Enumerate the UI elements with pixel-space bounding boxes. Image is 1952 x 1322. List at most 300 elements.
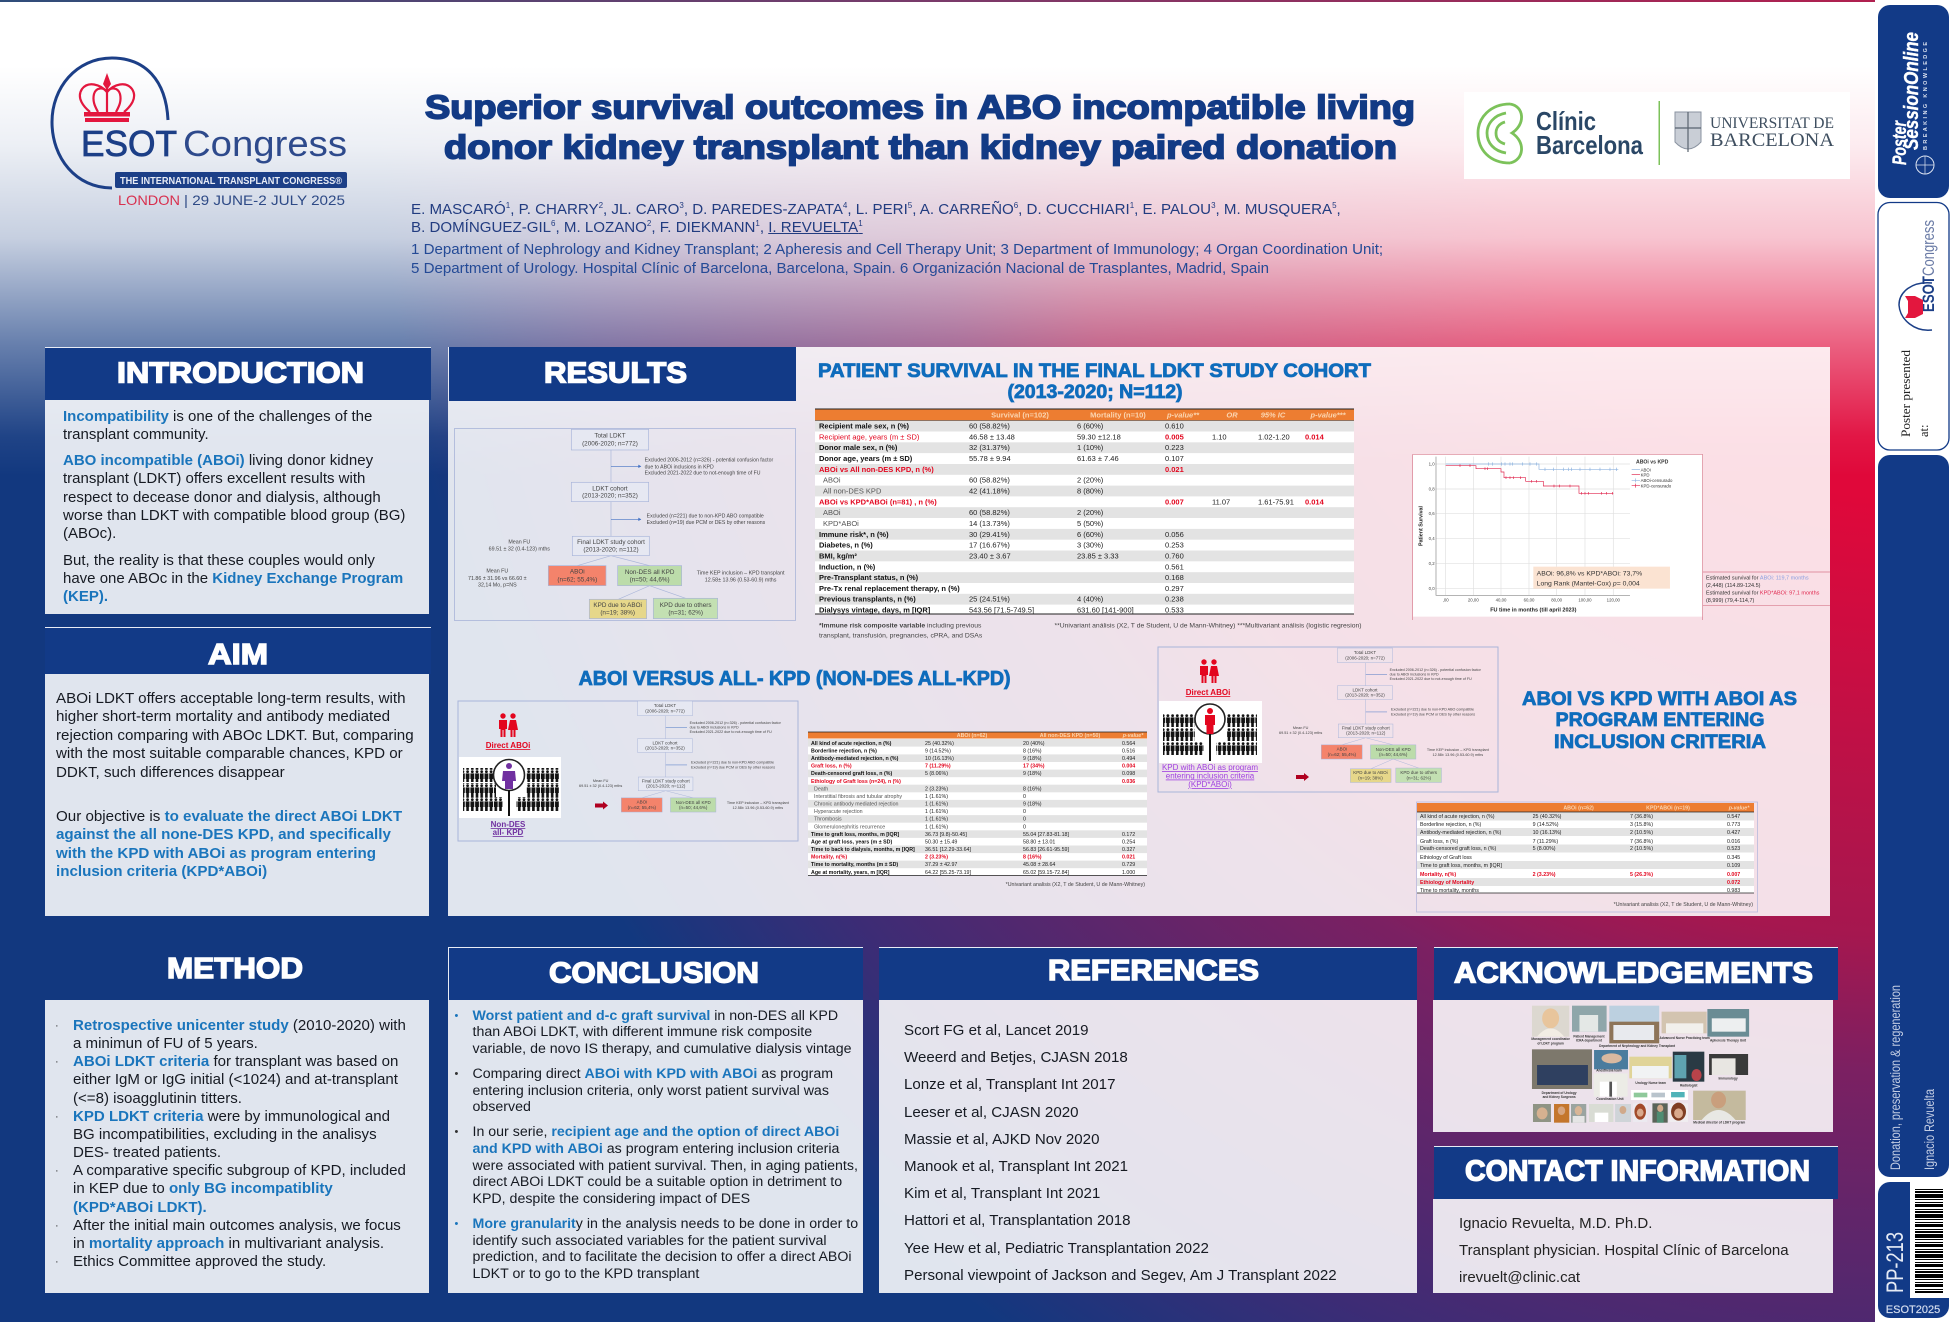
table: ABOi versus all KPD: Chronic antibody mediated rejection: [814, 802, 899, 808]
heading: patient survival: PATIENT SURVIVAL IN THE FINAL LDKT STUDY COHORT: [818, 360, 1371, 382]
text: introduction: worse than LDKT with compatible blood group (BG): [63, 507, 405, 524]
heading: acknowledgements: ACKNOWLEDGEMENTS: [1454, 958, 1813, 990]
table: ABOi versus all KPD: 17 (34%): [1023, 764, 1045, 770]
photo collage: Radiologist: [1680, 1084, 1698, 1088]
icon: crowd and magnifier: [459, 757, 561, 818]
flow boxes: Excluded (n=221) due to non-KPD ABO compatible: [691, 761, 774, 765]
icon: crowd and magnifier: [1159, 701, 1262, 763]
panel: method: ·: [55, 1220, 59, 1232]
logo: Clinic Barcelona and Universitat de Barcelona: Clínic: [1536, 106, 1596, 136]
flowchart: study cohort: 12.58± 13.96 (0.53-60.9) mths: [705, 577, 777, 583]
table: ABOi versus all KPD: 8 (16%): [1023, 786, 1042, 792]
flow boxes: Total LDKT: [1354, 650, 1376, 655]
table: ABOi versus all KPD: 2 (3.23%): [925, 786, 948, 792]
tab: topic and author: Donation, preservation & regeneration: [1888, 985, 1903, 1170]
table: ABOi versus all KPD: Thrombosis: [814, 817, 842, 823]
heading: ABOi vs KPD with ABOi: PROGRAM ENTERING: [1556, 709, 1764, 731]
tab: Poster Session Online: [1878, 5, 1949, 198]
text: method: a minimun of FU of 5 years.: [73, 1035, 258, 1052]
table: ABOi versus KPD with ABOi: Mortality, n(%): [1420, 872, 1456, 878]
table: ABOi versus all KPD: 0.516: [1122, 748, 1135, 754]
flow boxes: [579, 701, 790, 812]
table: ABOi versus all KPD: 50.30 ± 15.49: [925, 840, 957, 846]
table: ABOi versus KPD with ABOi: Borderline rejection, n (%): [1420, 822, 1481, 828]
table: patient survival: 30 (29.41%): [969, 530, 1010, 539]
table: ABOi versus KPD with ABOi: Graft loss, n (%): [1420, 839, 1458, 845]
y axis labels: 0,6: [1429, 511, 1435, 516]
flow boxes: Excluded (n=19) due PCM or DES by other reasons: [1391, 712, 1475, 716]
flowchart: study cohort: (2006-2020; n=772): [582, 440, 638, 447]
heading: ABOi versus all KPD: ABOI VERSUS ALL- KPD (NON-DES ALL-KPD): [579, 668, 1011, 690]
callout: survival rates: ABOi: 96,8% vs KPD*ABOi: 73,7%: [1537, 571, 1642, 578]
table: patient survival: p-value**: [1166, 410, 1200, 420]
table: patient survival: All non-DES KPD: [823, 486, 882, 496]
flow boxes: (n=50; 44,6%): [1379, 752, 1408, 757]
table: ABOi versus KPD with ABOi: *Univariant analisis (X2, T de Student, U de Mann-Whitney): [1614, 902, 1753, 908]
legend: ABOi: [1641, 467, 1651, 472]
flowchart: study cohort: (2013-2020; n=352): [582, 493, 638, 500]
heading: contact information: CONTACT INFORMATION: [1465, 1156, 1810, 1188]
text: method: A comparative specific subgroup of KPD, included: [73, 1162, 406, 1179]
flow boxes: (n=62; 55,4%): [1328, 752, 1356, 757]
x axis labels: ,00: [1443, 597, 1449, 602]
flow boxes: Excluded 2021-2022 due to not-enough time of FU: [690, 730, 772, 734]
flowchart: study cohort: Total LDKT: [594, 433, 626, 440]
text: introduction: Incompatibility is one of the challenges of the: [63, 408, 372, 424]
heading: aim: AIM: [208, 639, 268, 671]
table: patient survival: Diabetes, n (%): [819, 541, 873, 550]
heading: ABOi vs KPD with ABOi: [1522, 688, 1797, 753]
flow boxes: (n=62; 55,4%): [628, 805, 656, 810]
x axis labels: 80,00: [1551, 597, 1563, 602]
text: aim: rejection comparing with ABOc LDKT. But, comparing: [56, 727, 414, 744]
heading: introduction: [45, 347, 431, 400]
table: ABOi versus KPD with ABOi: 0.016: [1727, 839, 1740, 845]
table: ABOi versus all KPD: 1.000: [1122, 870, 1135, 876]
table: ABOi versus all KPD: 56.83 [26.61-95.59]: [1023, 847, 1069, 853]
heading: acknowledgements: [1434, 947, 1838, 1000]
x axis labels: 20,00: [1468, 597, 1479, 602]
icon: couple: [1200, 659, 1219, 683]
callout: estimated survival: Estimated survival for ABOi: 119,7 months: [1706, 575, 1809, 581]
flow boxes: due to ABOi inclusions in KPD: [690, 726, 739, 730]
flow boxes: (2013-2020; n=352): [1345, 693, 1385, 698]
table: ABOi versus all KPD: 2 (3.23%): [925, 855, 948, 861]
text: conclusion: More granularity in the analysis needs to be done in order to: [472, 1216, 858, 1232]
flowchart: study cohort: (n=19; 38%): [600, 610, 635, 617]
table: patient survival: 1.02-1.20: [1258, 432, 1290, 441]
table: ABOi versus all KPD: 36.73 [9.8)-50.45]: [925, 832, 967, 838]
flow boxes: Final LDKT study cohort: [1342, 725, 1390, 730]
text: references: Scort FG et al, Lancet 2019: [904, 1022, 1089, 1039]
table: patient survival: 95% IC: [1261, 410, 1286, 420]
y axis labels: 0,8: [1429, 486, 1435, 491]
title: [424, 88, 1415, 166]
panel: conclusion: [448, 947, 863, 1293]
table: patient survival: 0.014: [1305, 497, 1325, 506]
text: conclusion: than ABOi LDKT, with different immune risk composite: [472, 1024, 812, 1040]
text: method: (<=8) isoagglutinin titters.: [73, 1090, 242, 1107]
flowchart: study cohort: KPD due to others: [660, 602, 712, 609]
flow boxes: Excluded 2006-2012 (n=326) - potential confusion factor: [690, 721, 782, 725]
text: references: Yee Hew et al, Pediatric Transplantation 2022: [904, 1240, 1209, 1257]
table: ABOi versus all KPD: 1 (1.61%): [925, 817, 948, 823]
text: method: BG incompatibilities, excluding in the analisys: [73, 1126, 377, 1143]
table: patient survival: 0.610: [1165, 422, 1184, 431]
heading: references: REFERENCES: [1048, 955, 1259, 987]
text: conclusion: entering inclusion criteria, only worst patient survival was: [472, 1083, 829, 1099]
table: patient survival: 8 (80%): [1077, 486, 1104, 496]
text: method: ABOi LDKT criteria for transplant was based on: [73, 1053, 398, 1070]
flowchart: study cohort: [454, 428, 796, 620]
panel: introduction: [45, 347, 431, 614]
table: ABOi versus all KPD: 0.172: [1122, 832, 1135, 838]
heading: introduction: INTRODUCTION: [117, 358, 364, 390]
text: aim: inclusion criteria (KPD*ABOi): [56, 863, 267, 880]
text: method: (KPD*ABOi LDKT).: [73, 1199, 207, 1216]
table: patient survival: Pre-Transplant status, n (%): [819, 573, 919, 582]
flowchart: ABOi versus all KPD: [458, 701, 798, 841]
tab: poster code and barcode: PP-213: [1882, 1232, 1909, 1293]
text: introduction: transplant community.: [63, 426, 209, 443]
table: ABOi versus all KPD: 8 (16%): [1023, 855, 1042, 861]
flow boxes: KPD due to ABOi: [1353, 770, 1388, 775]
table: ABOi versus KPD with ABOi: KPD*ABOi (n=19): [1646, 806, 1690, 812]
tab: topic and author: [1878, 455, 1949, 1177]
text: conclusion: Worst patient and d-c graft survival in non-DES all KPD: [472, 1008, 838, 1024]
text: references: Personal viewpoint of Jackson and Segev, Am J Transplant 2022: [904, 1267, 1337, 1284]
title: donor kidney transplant than kidney paired donation: [444, 128, 1397, 166]
flow boxes: (2013-2020; n=112): [646, 784, 686, 789]
flow boxes: Time KEP inclusion – KPD transplant: [727, 801, 790, 805]
text: aim: with the most suitable comparable chances, KPD or: [56, 745, 403, 762]
panel: method: [45, 1000, 429, 1293]
table: patient survival: 0.005: [1165, 432, 1184, 441]
legend: ABOi-censurado: [1641, 478, 1673, 483]
photo collage: Department of Urology: [1542, 1091, 1577, 1095]
table: ABOi versus KPD with ABOi: p-value*: [1728, 806, 1750, 812]
text: introduction: But, the reality is that these couples would only: [63, 552, 375, 569]
table: ABOi versus all KPD: 0.494: [1122, 756, 1135, 762]
photo collage: [1531, 1006, 1750, 1125]
text: references: Kim et al, Transplant Int 2021: [904, 1185, 1100, 1202]
text: references: [904, 1022, 1337, 1284]
table: ABOi versus all KPD: 0.004: [1122, 764, 1135, 770]
tab: ESOT Congress: [1878, 202, 1949, 450]
photo collage: Immunology: [1719, 1076, 1738, 1080]
text: conclusion: variable, de novo IS therapy, and cumulative dialysis vintage: [472, 1041, 852, 1057]
x axis labels: 40,00: [1496, 597, 1507, 602]
text: method: Ethics Committee approved the study.: [73, 1253, 326, 1270]
table: patient survival: Immune risk*, n (%): [819, 530, 889, 539]
heading: results: RESULTS: [544, 358, 687, 390]
sidebar: [1875, 0, 1952, 1322]
table: ABOi versus all KPD: 20 (40%): [1023, 741, 1045, 747]
table: ABOi versus all KPD: Age at graft loss, years (m ± SD): [811, 840, 892, 846]
table: patient survival: ABOi: [823, 476, 841, 485]
table: patient survival: 543.56 [71.5-749.5]: [969, 606, 1034, 615]
text: introduction: transplant (LDKT) offers excellent results with: [63, 470, 365, 487]
heading: ABOi vs KPD with ABOi: INCLUSION CRITERIA: [1554, 731, 1766, 753]
flowchart: study cohort: Excluded 2006-2012 (n=326) - potential confusion factor: [645, 458, 773, 464]
text: method: in KEP due to only BG incompatiblity: [73, 1180, 333, 1197]
panel body: [1433, 1199, 1833, 1293]
table: ABOi versus all KPD: Antibody-mediated rejection, n (%): [811, 756, 899, 762]
heading: method: METHOD: [167, 953, 303, 985]
table: patient survival: 5 (50%): [1077, 519, 1104, 528]
table: ABOi versus all KPD: 0.327: [1122, 847, 1135, 853]
table: ABOi versus all KPD: ABOi (n=62): [957, 733, 987, 739]
table: patient survival: 46.58 ± 13.48: [969, 432, 1015, 441]
text: method: in mortality approach in multivariant analysis.: [73, 1235, 384, 1252]
tab: ESOT Congress: at:: [1917, 424, 1931, 437]
callout: estimated survival: Estimated survival for KPD*ABOi: 97,1 months: [1706, 590, 1820, 596]
table: ABOi versus KPD with ABOi: 2 (10.5%): [1630, 846, 1653, 852]
table: patient survival: 11.07: [1212, 497, 1230, 506]
table footnotes: [819, 622, 1362, 640]
table: patient survival: 1.61-75.91: [1258, 497, 1294, 506]
label: KPD with ABOi as program entering inclusion criteria: entering inclusion criteria: [1166, 772, 1255, 780]
table: ABOi versus all KPD: Mortality, n(%): [811, 855, 847, 861]
table: ABOi versus KPD with ABOi: Antibody-mediated rejection, n (%): [1420, 830, 1501, 836]
table: patient survival: 4 (40%): [1077, 595, 1104, 604]
table: ABOi versus all KPD: Graft loss, n (%): [811, 764, 852, 770]
photo collage: Medical director of LDKT program: [1693, 1121, 1745, 1125]
table: ABOi versus all KPD: All non-DES KPD (n=50): [1040, 733, 1100, 739]
table: ABOi versus KPD with ABOi: [1416, 802, 1758, 912]
title: Superior survival outcomes in ABO incompatible living: [425, 88, 1415, 126]
flow boxes: (n=50; 44,6%): [679, 805, 708, 810]
y axis labels: [1429, 461, 1435, 591]
flow boxes: Excluded (n=221) due to non-KPD ABO compatible: [1391, 708, 1474, 712]
flow boxes: (n=19; 38%): [1358, 776, 1383, 781]
table: patient survival: 0.297: [1165, 584, 1184, 593]
affiliations: 5 Department of Urology. Hospital Clínic of Barcelona, Barcelona, Spain. 6 Organización Nacional de Trasplantes, Madrid, Spain: [411, 260, 1269, 277]
photo collage: Patient Management: [1573, 1035, 1606, 1039]
table: ABOi versus all KPD: 9 (18%): [1023, 756, 1042, 762]
text: conclusion: [454, 1008, 858, 1282]
table: patient survival: 60 (58.82%): [969, 476, 1010, 485]
flowchart: study cohort: Final LDKT study cohort: [577, 539, 645, 546]
flow boxes: (2006-2020; n=772): [1345, 655, 1385, 660]
table: ABOi versus KPD with ABOi: Ethiology of Mortality: [1420, 880, 1474, 886]
table: ABOi versus all KPD: 0.021: [1122, 855, 1135, 861]
table: patient survival: ABOi vs All non-DES KPD, n (%): [819, 465, 934, 474]
heading: ABOi vs KPD with ABOi: ABOI VS KPD WITH ABOI AS: [1522, 688, 1797, 710]
flow boxes: Total LDKT: [654, 703, 676, 708]
text: contact details: irevuelt@clinic.cat: [1459, 1268, 1580, 1286]
logo: ESOT Congress: Congress: [183, 123, 347, 164]
logo: Clinic Barcelona and Universitat de Barcelona: UNIVERSITAT DE: [1710, 115, 1834, 132]
panel body: [448, 1000, 863, 1293]
table: patient survival: 0.056: [1165, 530, 1184, 539]
table: ABOi versus all KPD: Glomerulonephritis recurrence: [814, 824, 885, 830]
table: patient survival: 1 (10%): [1077, 443, 1104, 452]
table: patient survival: 0.007: [1165, 497, 1184, 506]
table: ABOi versus KPD with ABOi: Ethiology of Graft loss: [1420, 855, 1472, 861]
table: ABOi versus KPD with ABOi: ABOi (n=62): [1563, 806, 1594, 812]
flowchart: study cohort: KPD due to ABOi: [593, 602, 642, 609]
table: patient survival: 59.30 ±12.18: [1077, 432, 1121, 441]
text: method: DES- treated patients.: [73, 1144, 221, 1161]
photo collage: Coordination Unit: [1596, 1097, 1625, 1101]
panel: results: [448, 347, 1830, 916]
text: method: either IgM or IgG initial (<1024) and at-transplant: [73, 1071, 398, 1088]
panel: acknowledgements: [1433, 947, 1838, 1132]
x axis labels: 60,00: [1524, 597, 1535, 602]
table: ABOi versus KPD with ABOi: 0.773: [1727, 822, 1740, 828]
logo: Clinic Barcelona and Universitat de Barcelona: [1464, 92, 1850, 179]
authors: B. DOMÍNGUEZ-GIL6, M. LOZANO2, F. DIEKMANN1, I. REVUELTA1: [411, 219, 863, 236]
icon: couple: [499, 713, 518, 737]
table: ABOi versus all KPD: 36.51 [12.29-33.64]: [925, 847, 971, 853]
photo collage: Urology Nurse team: [1635, 1081, 1666, 1085]
flowchart: study cohort: Non-DES all KPD: [625, 569, 675, 576]
table: ABOi versus all KPD: Time to back to dialysis, months, m [IQR]: [811, 847, 915, 853]
text: method: KPD LDKT criteria were by immunological and: [73, 1108, 390, 1125]
table: ABOi versus all KPD: Death-censored graft loss, n (%): [811, 771, 892, 777]
table: patient survival: 42 (41.18%): [969, 486, 1010, 496]
label: KPD with ABOi as program entering inclusion criteria: (KPD*ABOi): [1188, 780, 1232, 789]
table: ABOi versus KPD with ABOi: 0.547: [1727, 814, 1740, 820]
legend: KPD: [1641, 472, 1650, 477]
table: patient survival: ABOi: [823, 508, 841, 517]
photo collage: Apheresis Therapy Unit: [1710, 1039, 1747, 1043]
flowchart: study cohort: Mean FU: [486, 569, 508, 575]
flowchart: study cohort: (n=31; 62%): [668, 610, 703, 617]
table: ABOi versus all KPD: 9 (14.52%): [925, 748, 951, 754]
table footnotes: *Immune risk composite variable including previous: [819, 622, 982, 630]
text: contact details: Ignacio Revuelta, M.D. Ph.D.: [1459, 1214, 1652, 1232]
table: ABOi versus KPD with ABOi: 10 (16.13%): [1533, 830, 1562, 836]
callout: estimated survival: (2,448) (114.89-124.5): [1706, 583, 1761, 589]
text: introduction: (ABOc).: [63, 525, 116, 542]
flow boxes: (2013-2020; n=352): [645, 746, 685, 751]
flow boxes: [1279, 648, 1490, 782]
table: patient survival: 14 (13.73%): [969, 519, 1010, 528]
table: ABOi versus all KPD: *Univariant analisis (X2, T de Student, U de Mann-Whitney): [1006, 882, 1145, 888]
panel body: [879, 1000, 1417, 1293]
text: contact details: [1459, 1214, 1789, 1286]
table: ABOi versus KPD with ABOi: 0.345: [1727, 855, 1740, 861]
flowchart: study cohort: 32,14 Mo, p=NS: [478, 583, 517, 589]
table: ABOi versus KPD with ABOi: 0.007: [1727, 872, 1740, 878]
table: ABOi versus all KPD: 0.098: [1122, 771, 1135, 777]
flow boxes: (2013-2020; n=112): [1346, 731, 1386, 736]
table: ABOi versus all KPD: 0: [1023, 824, 1026, 830]
table: ABOi versus all KPD: Time to graft loss, months, m [IQR]: [811, 832, 899, 838]
table: ABOi versus all KPD: All kind of acute rejection, n (%): [811, 741, 892, 747]
arrow: [595, 802, 608, 810]
callout: estimated survival: [1703, 572, 1830, 606]
table: patient survival: [815, 409, 1354, 615]
table: patient survival: Recipient age, years (m ± SD): [819, 432, 920, 441]
table: ABOi versus all KPD: Hyperacute rejection: [814, 809, 863, 815]
legend: [1632, 459, 1673, 488]
table: patient survival: 0.168: [1165, 573, 1184, 582]
text: aim: Our objective is to evaluate the direct ABOi LDKT: [56, 808, 402, 825]
table: patient survival: Previous transplants, n (%): [819, 595, 916, 604]
table: patient survival: 3 (30%): [1077, 541, 1104, 550]
text: aim: higher short-term mortality and antibody mediated: [56, 708, 390, 725]
table: ABOi versus all KPD: 0: [1023, 809, 1026, 815]
flow boxes: Time KEP inclusion – KPD transplant: [1427, 748, 1490, 752]
text: aim: with the KPD with ABOi as program entering: [56, 845, 376, 862]
tab: poster code and barcode: [1878, 1182, 1949, 1318]
x axis labels: 120,00: [1607, 597, 1621, 602]
flow boxes: ABOi: [1337, 747, 1347, 752]
flowchart: study cohort: (2013-2020; n=112): [583, 546, 639, 553]
table: ABOi versus all KPD: 9 (18%): [1023, 802, 1042, 808]
table: ABOi versus all KPD: 0: [1023, 794, 1026, 800]
tab: topic and author: Ignacio Revuelta: [1922, 1089, 1937, 1170]
text: conclusion: In our serie, recipient age and the option of direct ABOi: [472, 1124, 839, 1140]
text: references: Hattori et al, Transplantation 2018: [904, 1212, 1131, 1229]
y axis labels: 0,2: [1429, 561, 1435, 566]
table: patient survival: OR: [1226, 410, 1238, 420]
table: ABOi versus all KPD: 64.22 [55.25-73.19]: [925, 870, 971, 876]
label: direct ABOi: Direct ABOi: [486, 741, 530, 750]
table: ABOi versus KPD with ABOi: 7 (36.8%): [1630, 839, 1653, 845]
label: direct ABOi: Direct ABOi: [1186, 688, 1230, 697]
table: ABOi versus KPD with ABOi: 0.523: [1727, 846, 1740, 852]
logo: ESOT Congress: ESOT: [81, 123, 177, 164]
tab: Poster Session Online: Poster: [1890, 120, 1911, 165]
flow boxes: Final LDKT study cohort: [642, 778, 690, 783]
table footnotes: transplant, transfusión, pregnancies, cPRA, and DSAs: [819, 632, 983, 640]
flow boxes: 69.51 ± 32 (0.4-123) mths: [579, 784, 622, 788]
flow boxes: KPD due to others: [1400, 770, 1438, 775]
table: patient survival: 0.533: [1165, 606, 1184, 615]
text: introduction: ABO incompatible (ABOi) living donor kidney: [63, 452, 373, 469]
table: ABOi versus all KPD: Ethiology of Graft loss (n=24), n (%): [811, 779, 901, 785]
table: ABOi versus KPD with ABOi: 7 (11.29%): [1533, 839, 1558, 845]
panel: contact information: [1433, 1146, 1838, 1293]
table: patient survival: 61.63 ± 7.46: [1077, 454, 1119, 463]
table: patient survival: BMI, kg/m²: [819, 551, 857, 560]
panel: method: ·: [55, 1256, 59, 1268]
survival curve: ABOi: [1446, 462, 1618, 471]
table: patient survival: p-value***: [1309, 410, 1347, 420]
table: patient survival: 17 (16.67%): [969, 541, 1010, 550]
label: KPD with ABOi as program entering inclusion criteria: [1162, 763, 1258, 789]
legend: ABOi vs KPD: [1636, 459, 1669, 465]
heading: conclusion: CONCLUSION: [549, 958, 759, 990]
text: conclusion: identify such associated variables for the patient survival: [472, 1233, 827, 1249]
table: patient survival: 0.238: [1165, 595, 1184, 604]
affiliations: [411, 241, 1383, 277]
flow boxes: Excluded (n=19) due PCM or DES by other reasons: [691, 765, 775, 769]
panel: references: [879, 947, 1417, 1293]
panel: method: ·: [55, 1111, 59, 1123]
flow boxes: ABOi: [637, 800, 647, 805]
table: patient survival: 631.60 [141-900]: [1077, 606, 1134, 615]
flow boxes: Mean FU: [593, 779, 609, 783]
table: patient survival: 0.561: [1165, 562, 1184, 571]
text: contact details: Transplant physician. Hospital Clínic of Barcelona: [1459, 1242, 1789, 1258]
table: patient survival: 60 (58.82%): [969, 422, 1010, 431]
flowchart: study cohort: Excluded 2021-2022 due to not-enough time of FU: [645, 471, 761, 477]
table: patient survival: 6 (60%): [1077, 530, 1104, 539]
panel: method: ·: [55, 1056, 59, 1068]
x axis labels: [1443, 597, 1621, 602]
text: conclusion: direct ABOi LDKT could be a suitable option in detriment to: [472, 1174, 842, 1190]
table: ABOi versus KPD with ABOi: Death-censored graft loss, n (%): [1420, 846, 1496, 852]
flow boxes: 12.58± 13.96 (0.53-60.9) mths: [732, 806, 783, 810]
logo: ESOT Congress: LONDON: [118, 192, 180, 208]
table: ABOi versus KPD with ABOi: 7 (36.8%): [1630, 814, 1653, 820]
flowchart: study cohort: ABOi: [570, 569, 585, 576]
